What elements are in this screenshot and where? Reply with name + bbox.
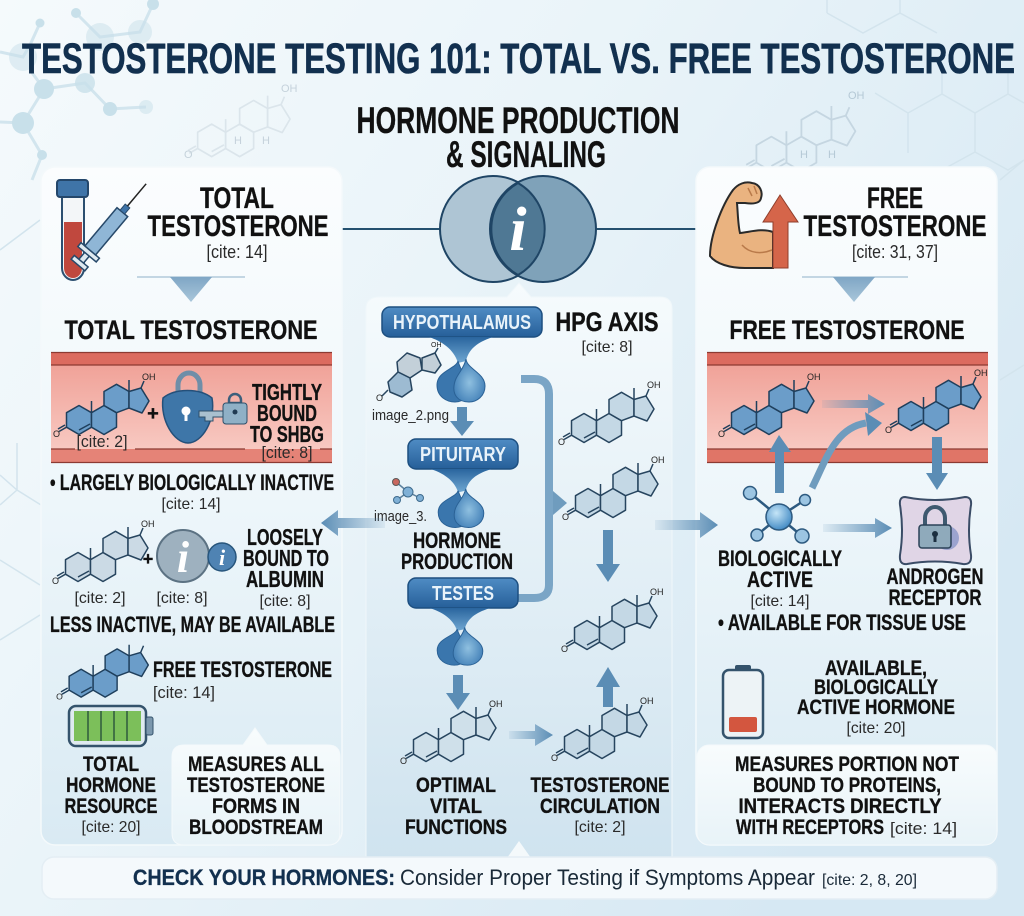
arrow: to circulation [509,724,553,746]
arrow: hypothalamus to pituitary [450,407,474,436]
molecule [718,372,820,439]
free testosterone row: O [56,692,63,702]
label: available hormone: ACTIVE HORMONE [797,696,955,719]
gland: testes [430,608,490,665]
label: optimal vital functions: FUNCTIONS [405,816,507,839]
footer bar: CHECK YOUR HORMONES: [133,865,395,890]
label: available hormone: AVAILABLE, [825,657,927,680]
bullet: largely inactive [50,470,334,513]
bullet: largely inactive: [cite: 14] [162,496,220,513]
arrow: center to free [655,512,718,538]
molecule with albumin: LOOSELY [247,524,323,550]
arrow: curved up to molecule [812,412,882,488]
arrow: down to receptor [926,437,948,490]
heading: hormone production and signaling: HORMONE PRODUCTION [356,100,680,141]
molecule with albumin: ALBUMIN [246,566,324,592]
background molecular pattern: OH [848,90,865,102]
molecule: image 2 [372,342,449,424]
arrow: testes down [446,675,470,710]
arrow: bracket to molecule [553,491,567,515]
label: total hormone resource: TOTAL [83,753,139,776]
panel: total testosterone [41,167,342,845]
callout: measures all: MEASURES ALL [188,753,324,776]
bullet: largely inactive: • LARGELY BIOLOGICALLY INACTIVE [50,470,334,495]
label: total hormone resource: [cite: 20] [82,819,140,836]
label: biologically active: ACTIVE [747,567,813,592]
molecule: O [718,429,725,439]
heading: hormone production and signaling: & SIGNALING [446,134,606,175]
molecule: middle: OH [651,455,664,465]
label: available hormone: BIOLOGICALLY [814,676,938,699]
heading: free testosterone: [cite: 31, 37] [852,242,938,262]
heading: hpg axis: HPG AXIS [556,307,658,337]
label: total hormone resource: HORMONE [66,774,156,797]
gland: hypothalamus [429,337,493,402]
molecule with albumin: OH [141,519,154,529]
molecule: bottom left: O [400,756,407,766]
heading: hormone production and signaling [356,100,680,175]
molecule [53,372,156,439]
molecule: image 3 [374,478,427,525]
callout: measures all: TESTOSTERONE [187,774,325,797]
callout: measures portion: BOUND TO PROTEINS, [753,774,941,797]
label: total hormone resource: RESOURCE [64,795,158,818]
molecule with albumin: [cite: 8] [156,590,208,607]
callout: measures portion: [cite: 14] [890,819,957,838]
icon: lock with key [163,373,247,443]
molecule with albumin [52,519,329,610]
molecule with albumin: i [177,533,190,582]
callout: measures portion: MEASURES PORTION NOT [735,753,959,776]
label: tightly bound: BOUND [257,400,317,426]
background molecular pattern: OH [281,83,298,95]
icon: full battery [69,706,153,746]
molecule: image 3: image_3. [374,508,427,525]
molecule: OH [974,368,988,378]
molecule [885,368,988,435]
pill: pituitary [408,439,518,469]
text: less inactive: LESS INACTIVE, MAY BE AVAILABLE [50,612,335,637]
arrow: center to total [321,510,385,536]
heading: total testosterone [148,182,328,262]
molecule with albumin: BOUND TO [243,545,329,571]
heading: hpg axis: [cite: 8] [582,339,632,356]
icon: free hormone node [744,486,810,543]
callout: measures portion: INTERACTS DIRECTLY [738,795,942,818]
molecule: middle [562,455,664,522]
label: optimal vital functions: VITAL [430,795,482,818]
molecule: bottom left: OH [489,699,502,709]
background molecular pattern: O [743,165,752,177]
molecule with albumin: [cite: 2] [74,590,126,607]
blood vessel: free hormone [707,352,988,463]
footer bar: Consider Proper Testing if Symptoms Appear [400,865,815,890]
molecule: top: O [558,437,565,447]
background molecular pattern [0,0,1024,640]
molecule: OH [807,372,820,382]
label: hormone production [401,528,513,574]
subheading: FREE TESTOSTERONE [730,315,964,345]
icon: flexed arm [710,182,773,268]
molecule: top [558,380,660,447]
molecule: lower [561,587,664,654]
molecule with albumin: [cite: 8] [260,593,310,610]
label: testosterone circulation: [cite: 2] [574,819,626,836]
heading: free testosterone [804,182,986,262]
heading: total testosterone: TESTOSTERONE [148,210,328,243]
blood vessel: shbg binding [51,352,332,463]
molecule: lower: OH [650,587,664,597]
connector lines [342,228,696,230]
molecule: OH [142,372,156,382]
heading: free testosterone: FREE [867,182,923,215]
label: testosterone circulation: TESTOSTERONE [530,774,670,797]
arrow: between molecules [822,394,885,414]
molecule with albumin: i [219,545,226,570]
callout: measures all: FORMS IN [212,795,300,818]
arrow: down [137,277,245,302]
footer bar [42,841,997,899]
arrow: down [802,277,908,302]
pill: hypothalamus: HYPOTHALAMUS [393,312,531,334]
label: available hormone [797,657,955,737]
label: available hormone: [cite: 20] [846,720,906,737]
background molecular pattern: H [262,135,270,147]
molecule: image 2: O [376,393,383,403]
label: tightly bound: TIGHTLY [252,379,322,405]
molecule with albumin: O [52,576,59,586]
molecule: bottom left [400,699,502,766]
pill: hypothalamus [382,307,542,337]
label: tightly bound [250,379,324,462]
molecule: top: OH [647,380,660,390]
label: tightly bound: [cite: 8] [262,443,312,462]
heading: total testosterone: [cite: 14] [206,242,268,262]
heading: total testosterone: TOTAL [200,182,274,215]
label: optimal vital functions [405,774,507,839]
subheading: TOTAL TESTOSTERONE [64,315,318,345]
bracket: feedback loop [518,379,549,598]
molecule: O [53,429,60,439]
label: hormone production: PRODUCTION [401,549,513,574]
free testosterone row: [cite: 14] [153,683,215,702]
molecule: bottom right: O [551,753,558,763]
label: androgen receptor: ANDROGEN [886,564,984,589]
background molecular pattern: O [184,149,193,161]
label: testosterone circulation [530,774,670,836]
icon: androgen receptor [900,497,971,564]
label: tightly bound: TO SHBG [250,421,324,447]
molecule: image 2: image_2.png [372,407,449,424]
free testosterone row [56,645,332,702]
icon: low battery [723,665,763,738]
callout: measures all: BLOODSTREAM [189,816,323,839]
pill: testes [408,578,518,608]
arrow: up into vessel [769,435,791,493]
molecule: bottom right: OH [640,696,654,706]
plus: + [147,403,159,425]
footer bar: [cite: 2, 8, 20] [822,872,917,889]
pill: pituitary: PITUITARY [420,444,507,466]
heading: hpg axis [556,307,658,356]
gland: pituitary [431,469,491,528]
molecule: lower: O [561,644,568,654]
callout: measures portion: WITH RECEPTORS [736,816,884,839]
icon: info venn diagram [440,176,596,282]
icon: info venn diagram: i [509,196,527,264]
molecule with albumin: + [143,549,153,569]
arrow: down [596,530,620,582]
molecule: O [885,425,892,435]
icon: up arrow [763,195,798,268]
icon: test tube and syringe [57,176,155,280]
molecule: bottom right [551,696,654,763]
free testosterone row: FREE TESTOSTERONE [153,657,332,682]
background molecular pattern: H [800,149,808,161]
callout: measures all [172,728,340,845]
label: total hormone resource [64,753,158,836]
label: androgen receptor [886,564,984,610]
cite: [cite: 2] [76,432,128,451]
panel: hpg axis [366,283,672,860]
label: biologically active [718,546,842,610]
label: androgen receptor: RECEPTOR [888,585,982,610]
label: hormone production: HORMONE [413,528,501,553]
pill: testes: TESTES [432,583,494,605]
label: testosterone circulation: CIRCULATION [540,795,660,818]
callout: measures portion [697,745,997,845]
label: biologically active: BIOLOGICALLY [718,546,842,571]
label: optimal vital functions: OPTIMAL [416,774,496,797]
background molecular pattern: H [828,149,836,161]
panel: free testosterone [696,167,997,845]
molecule: middle: O [562,512,569,522]
label: biologically active: [cite: 14] [750,593,810,610]
molecule: image 2: OH [431,342,442,349]
arrow: node to receptor [823,518,892,538]
background molecular pattern: H [234,135,242,147]
arrow: up [596,667,620,707]
